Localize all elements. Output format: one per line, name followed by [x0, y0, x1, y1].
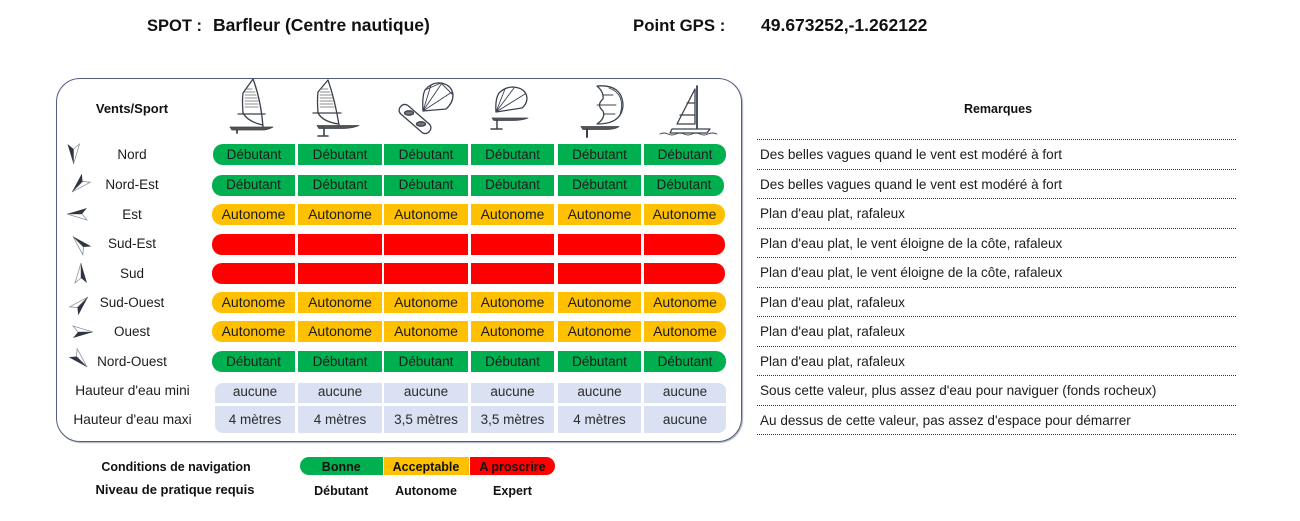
row: Nord-Ouest: Nord-Ouest	[97, 354, 167, 369]
icon: wind arrow south-east	[72, 236, 92, 256]
remark: Sud-Ouest: Plan d'eau plat, rafaleux	[760, 295, 905, 310]
row: Sud-Ouest: Autonome	[308, 294, 372, 310]
legend level: expert: Expert	[493, 484, 532, 498]
icon: wind arrow north	[68, 143, 80, 164]
title: spot name: SPOT :	[147, 17, 202, 35]
remark: Sud: Plan d'eau plat, le vent éloigne de la côte, rafaleux	[760, 265, 1062, 280]
row: minimum water height: aucune	[577, 384, 622, 399]
row: Nord-Est: Débutant	[572, 176, 627, 192]
row: Nord: Débutant	[313, 147, 367, 162]
legend swatch: prohibited	[470, 457, 555, 475]
legend level: autonomous: Autonome	[395, 484, 457, 498]
row: Nord-Est: Débutant	[657, 176, 711, 192]
icon: windsurf	[230, 79, 273, 133]
row: Sud-Est	[72, 234, 725, 256]
remark: Sud-Est: Plan d'eau plat, le vent éloigne de la côte, rafaleux	[760, 236, 1062, 251]
remark: Nord	[757, 140, 1236, 170]
row: Nord: Débutant	[227, 147, 281, 162]
row: Nord-Ouest: Débutant	[313, 354, 367, 369]
remark: Nord-Est	[757, 170, 1236, 199]
header: remarks: Remarques	[964, 102, 1032, 116]
row: Sud-Ouest: Sud-Ouest	[100, 295, 164, 310]
row: Nord-Est: Nord-Est	[105, 176, 159, 192]
row: Nord-Ouest	[68, 348, 726, 372]
row: Nord: Débutant	[572, 147, 627, 162]
remark: Nord: Des belles vagues quand le vent est modéré à fort	[760, 147, 1062, 162]
title: GPS point: Point GPS :	[633, 16, 725, 35]
title: spot name: Barfleur (Centre nautique)	[213, 15, 430, 35]
row: Nord-Ouest: Débutant	[226, 354, 281, 369]
row: Ouest: Autonome	[308, 323, 372, 339]
row: Ouest	[72, 321, 726, 342]
row: minimum water height: aucune	[404, 384, 448, 399]
row: Nord-Est: Débutant	[313, 176, 367, 192]
icon: kite foil	[491, 87, 528, 129]
row: minimum water height: aucune	[318, 384, 362, 399]
remark: Sud	[757, 258, 1236, 288]
legend swatch: acceptable	[384, 457, 468, 475]
remark: maximum water height	[757, 406, 1236, 435]
sport icons	[230, 78, 718, 138]
row: Nord	[68, 143, 726, 165]
row: Sud	[74, 262, 725, 284]
row: minimum water height: aucune	[663, 384, 707, 399]
panel: wind and sport table	[56, 78, 742, 442]
heading: winds and sports: Vents/Sport	[96, 101, 168, 116]
row: Ouest: Autonome	[222, 323, 285, 339]
row: Nord-Est: Débutant	[226, 176, 281, 192]
row: maximum water height: 3,5 mètres	[394, 412, 458, 427]
row: Nord-Est	[72, 174, 724, 196]
title: GPS point: 49.673252,-1.262122	[761, 15, 927, 35]
row: Sud-Est: Sud-Est	[108, 236, 156, 250]
row: Nord-Ouest: Débutant	[399, 354, 453, 369]
remark: Nord-Ouest	[757, 347, 1236, 376]
row: Nord-Est: Débutant	[485, 176, 540, 192]
remark: maximum water height: Au dessus de cette valeur, pas assez d'espace pour démarrer	[760, 413, 1131, 428]
icon: kitesurf	[397, 83, 453, 136]
icon: wind arrow north-east	[72, 174, 92, 192]
icon: wind arrow west	[72, 325, 94, 338]
row: Sud: Sud	[120, 266, 144, 280]
row: Ouest: Ouest	[114, 324, 150, 339]
row: maximum water height: 4 mètres	[573, 412, 626, 427]
row: Est: Autonome	[481, 206, 544, 222]
row: maximum water height: aucune	[663, 412, 707, 427]
icon: sailboat	[660, 86, 717, 135]
legend swatch: good	[300, 457, 382, 475]
row: minimum water height: aucune	[490, 384, 535, 399]
row: Nord: Débutant	[658, 147, 712, 162]
row: maximum water height	[73, 406, 726, 433]
row: Ouest: Autonome	[653, 323, 717, 339]
row: minimum water height	[75, 383, 726, 403]
row: Ouest: Autonome	[481, 323, 544, 339]
row: Nord-Ouest: Débutant	[572, 354, 627, 369]
row: Nord-Est: Débutant	[399, 176, 453, 192]
icon: wind arrow south-west	[68, 296, 88, 316]
icon: wing foil	[581, 86, 623, 137]
row: Est: Autonome	[222, 206, 285, 222]
row: Sud-Ouest: Autonome	[222, 294, 285, 310]
row: Sud-Ouest	[68, 292, 726, 316]
row: Est	[66, 204, 725, 225]
row: maximum water height: Hauteur d'eau maxi	[73, 412, 192, 427]
row: Est: Autonome	[568, 206, 631, 222]
remark: Est: Plan d'eau plat, rafaleux	[760, 206, 905, 221]
legend level: beginner: Débutant	[314, 484, 368, 498]
icon: wind arrow south	[74, 262, 87, 284]
icon: windfoil	[313, 80, 359, 136]
icon: wind arrow east	[66, 208, 88, 221]
row: Est: Autonome	[653, 206, 716, 222]
row: minimum water height: aucune	[233, 384, 277, 399]
row: maximum water height: 3,5 mètres	[481, 412, 544, 427]
title: GPS point	[633, 15, 927, 35]
row: Est: Autonome	[308, 206, 372, 222]
row: Ouest: Autonome	[568, 323, 631, 339]
icon: wind arrow north-west	[68, 348, 88, 368]
remark: Sud-Ouest	[757, 288, 1236, 317]
legend label: conditions: Conditions de navigation	[101, 460, 251, 474]
legend: required practice level	[96, 482, 532, 498]
row: Sud-Ouest: Autonome	[481, 294, 544, 310]
remark: Ouest: Plan d'eau plat, rafaleux	[760, 324, 905, 339]
remark: minimum water height: Sous cette valeur, plus assez d'eau pour naviguer (fonds rocheux)	[760, 383, 1156, 398]
row: Ouest: Autonome	[394, 323, 458, 339]
row: Nord: Débutant	[399, 147, 453, 162]
row: Nord: Nord	[117, 147, 147, 162]
row: Nord: Débutant	[485, 147, 540, 162]
legend swatch: good: Bonne	[322, 460, 361, 474]
row: Nord-Ouest: Débutant	[485, 354, 540, 369]
remark: Est	[757, 199, 1236, 229]
legend swatch: prohibited: A proscrire	[479, 460, 546, 474]
legend swatch: acceptable: Acceptable	[393, 460, 459, 474]
row: Sud-Ouest: Autonome	[568, 294, 631, 310]
row: Sud-Ouest: Autonome	[394, 294, 458, 310]
row: Est: Autonome	[394, 206, 458, 222]
row: Nord-Ouest: Débutant	[658, 354, 712, 369]
remarks header divider	[757, 139, 1236, 140]
row: minimum water height: Hauteur d'eau mini	[75, 383, 190, 398]
row: Est: Est	[122, 206, 142, 222]
legend label: practice level: Niveau de pratique requis	[96, 482, 254, 497]
remark: Ouest	[757, 317, 1236, 347]
row: maximum water height: 4 mètres	[314, 412, 366, 427]
remark: Nord-Est: Des belles vagues quand le vent est modéré à fort	[760, 177, 1062, 192]
row: maximum water height: 4 mètres	[229, 412, 281, 427]
legend: navigation conditions	[101, 457, 555, 475]
remark: Sud-Est	[757, 229, 1236, 258]
row: Sud-Ouest: Autonome	[653, 294, 717, 310]
remark: minimum water height	[757, 376, 1236, 406]
remark: Nord-Ouest: Plan d'eau plat, rafaleux	[760, 354, 905, 369]
